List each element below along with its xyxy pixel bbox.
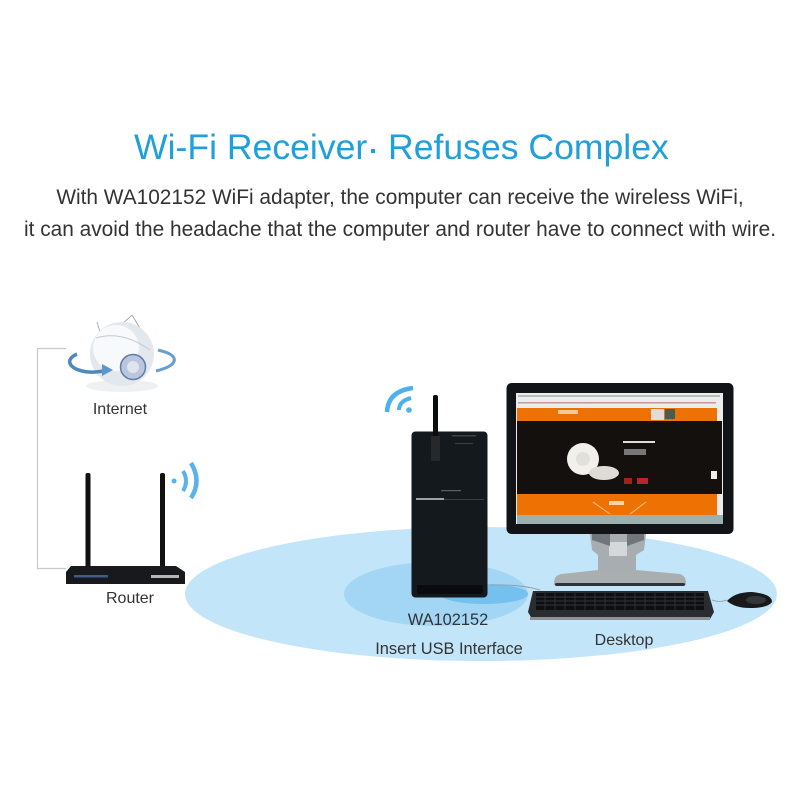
title: Refuses Complex	[388, 127, 669, 167]
title	[134, 127, 669, 167]
label: Insert USB Interface: Insert USB Interface	[375, 640, 523, 658]
icon: router	[66, 473, 185, 584]
description text	[24, 186, 776, 241]
icon: internet globe	[70, 315, 174, 392]
coverage ellipse	[185, 527, 777, 661]
description text: it can avoid the headache that the computer and router have to connect with wire.	[24, 218, 776, 241]
description text: With WA102152 WiFi adapter, the computer can receive the wireless WiFi,	[56, 186, 744, 209]
monitor	[506, 383, 734, 534]
label: WA102152: WA102152	[408, 611, 488, 629]
label: Router: Router	[106, 590, 155, 607]
connector line internet to router	[38, 348, 66, 568]
keyboard	[528, 591, 714, 620]
icon: desktop wifi signal	[387, 388, 413, 413]
icon: router wifi signal	[172, 463, 196, 498]
label: Desktop: Desktop	[595, 632, 653, 649]
mouse	[727, 592, 772, 608]
label: Internet: Internet	[93, 401, 148, 418]
cables	[490, 585, 727, 602]
title: Wi-Fi Receiver	[134, 127, 367, 167]
computer tower with adapter	[412, 395, 488, 598]
monitor stand	[554, 534, 686, 586]
